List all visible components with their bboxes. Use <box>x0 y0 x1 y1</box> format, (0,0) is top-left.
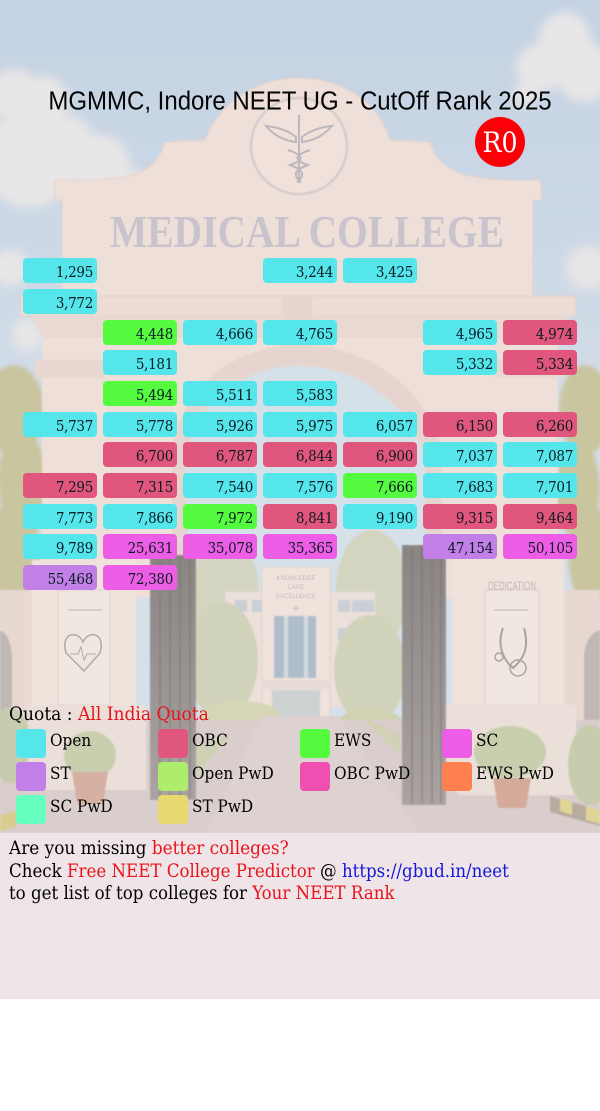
background illustration: medical college gate: KNOWLEDGE <box>276 576 316 582</box>
distant building <box>225 592 375 707</box>
rank table: 5,583 <box>296 386 333 404</box>
rank table: 6,700 <box>136 447 173 465</box>
rank table: 72,380 <box>128 570 173 588</box>
predictor promo panel: Are you missing better colleges? <box>9 838 289 859</box>
predictor promo panel <box>0 833 600 999</box>
rank table: 7,683 <box>456 478 493 496</box>
rank table: 6,900 <box>376 447 413 465</box>
rank table: 5,511 <box>216 386 253 404</box>
rank table: 4,448 <box>136 325 173 343</box>
rank table: 9,789 <box>56 539 93 557</box>
rank table: 1,295 <box>56 263 93 281</box>
rank table: 9,315 <box>456 509 493 527</box>
rank table: 7,972 <box>216 509 253 527</box>
rank table: 8,841 <box>296 509 333 527</box>
rank table: 7,295 <box>56 478 93 496</box>
rank table: 5,334 <box>536 355 573 373</box>
background illustration: medical college gate <box>0 0 600 833</box>
legend: OBC PwD <box>334 764 410 784</box>
pillar motifs <box>65 635 101 671</box>
rank table: 7,773 <box>56 509 93 527</box>
upper block <box>55 78 541 300</box>
background illustration: medical college gate: MEDICAL COLLEGE <box>110 206 504 257</box>
background illustration: medical college gate: DEDICATION <box>488 579 536 593</box>
background illustration: medical college gate: EXCELLENCE <box>276 594 316 600</box>
sides <box>0 590 600 800</box>
legend: SC <box>476 731 498 751</box>
rank table: 5,332 <box>456 355 493 373</box>
rank table: 7,866 <box>136 509 173 527</box>
rank table: 5,494 <box>136 386 173 404</box>
legend: OBC <box>192 731 228 751</box>
rank table: 4,765 <box>296 325 333 343</box>
rank table: 25,631 <box>128 539 173 557</box>
rank table: 7,037 <box>456 447 493 465</box>
legend <box>16 729 554 824</box>
rank table: 9,464 <box>536 509 573 527</box>
legend: ST PwD <box>192 797 253 817</box>
legend: Open <box>50 731 91 751</box>
rank table: 7,576 <box>296 478 333 496</box>
rank table: 6,150 <box>456 417 493 435</box>
rank table: 5,181 <box>136 355 173 373</box>
rank table: 35,365 <box>288 539 333 557</box>
rank table: 4,974 <box>536 325 573 343</box>
predictor promo panel: to get list of top colleges for Your NEET Rank <box>9 883 395 904</box>
ground <box>0 720 600 833</box>
title: MGMMC, Indore NEET UG - CutOff Rank 2025 <box>48 87 552 116</box>
rank table: 5,975 <box>296 417 333 435</box>
right pillar <box>452 560 564 710</box>
rank table: 6,787 <box>216 447 253 465</box>
rank table: 35,078 <box>208 539 253 557</box>
rank table: 7,087 <box>536 447 573 465</box>
legend: EWS PwD <box>476 764 554 784</box>
rank table: 6,057 <box>376 417 413 435</box>
rank table: 9,190 <box>376 509 413 527</box>
rank table: 47,154 <box>448 539 493 557</box>
round badge R0 <box>475 117 525 167</box>
legend: SC PwD <box>50 797 113 817</box>
legend: EWS <box>334 731 371 751</box>
rank table: 4,965 <box>456 325 493 343</box>
rank table: 50,105 <box>528 539 573 557</box>
gates <box>150 555 196 800</box>
background illustration: medical college gate: + <box>292 601 300 615</box>
rank table: 55,468 <box>48 570 93 588</box>
rank table: 5,778 <box>136 417 173 435</box>
left pillar <box>32 560 136 710</box>
round badge R0: R0 <box>482 126 518 159</box>
quota heading: Quota : All India Quota <box>9 703 209 725</box>
rank table: 3,425 <box>376 263 413 281</box>
predictor promo panel: Check Free NEET College Predictor @ https://gbud.in/neet <box>9 861 509 882</box>
rank table: 3,772 <box>56 294 93 312</box>
legend: Open PwD <box>192 764 274 784</box>
rank table: 7,540 <box>216 478 253 496</box>
side shrubs <box>0 707 30 783</box>
rank table: 4,666 <box>216 325 253 343</box>
rank table: 5,737 <box>56 417 93 435</box>
rank table: 5,926 <box>216 417 253 435</box>
rank table: 7,701 <box>536 478 573 496</box>
rank table <box>23 258 577 590</box>
kerb <box>550 796 600 826</box>
rank table: 6,844 <box>296 447 333 465</box>
rank table: 3,244 <box>296 263 333 281</box>
rank table: 7,315 <box>136 478 173 496</box>
rank table: 6,260 <box>536 417 573 435</box>
distant trees <box>191 540 259 640</box>
rank table: 7,666 <box>376 478 413 496</box>
plants <box>64 731 116 779</box>
background illustration: medical college gate: CARE <box>288 585 304 591</box>
legend: ST <box>50 764 71 784</box>
